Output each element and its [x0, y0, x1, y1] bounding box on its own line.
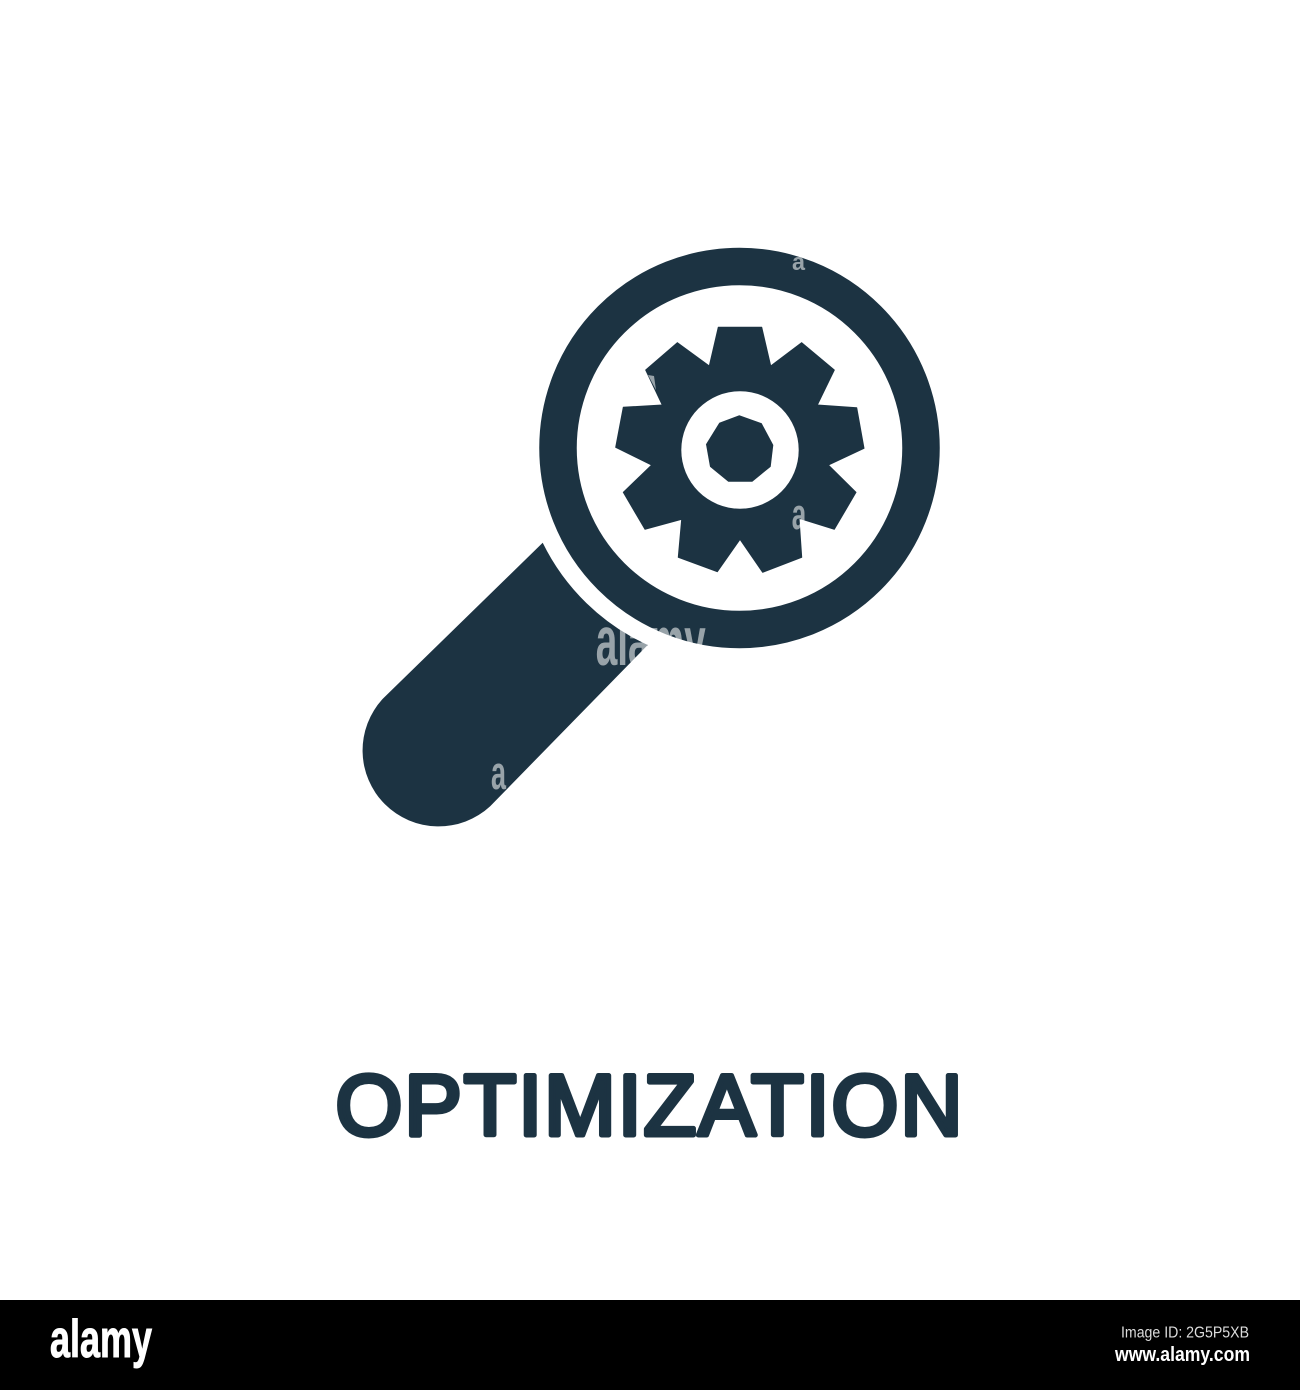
- magnifier handle: [363, 543, 648, 826]
- magnifier ring: [558, 266, 921, 630]
- title: OPTIMIZATION: [336, 1058, 962, 1154]
- icon: magnifying glass with gear: [363, 266, 921, 826]
- image id: Image ID: 2G5P5XB: [1121, 1324, 1249, 1342]
- gear hub: [706, 415, 773, 482]
- watermark fragments: alamy: [596, 602, 706, 680]
- website: www.alamy.com: [1114, 1344, 1250, 1366]
- watermark fragments: a: [491, 746, 506, 799]
- gear: [616, 327, 864, 572]
- watermark fragments: [491, 249, 807, 799]
- watermark fragments: a: [792, 249, 806, 276]
- footer logo: alamy: [50, 1310, 152, 1369]
- footer bar: [0, 1300, 1300, 1390]
- gear centre hole: [681, 391, 799, 509]
- watermark fragments: a: [792, 490, 807, 539]
